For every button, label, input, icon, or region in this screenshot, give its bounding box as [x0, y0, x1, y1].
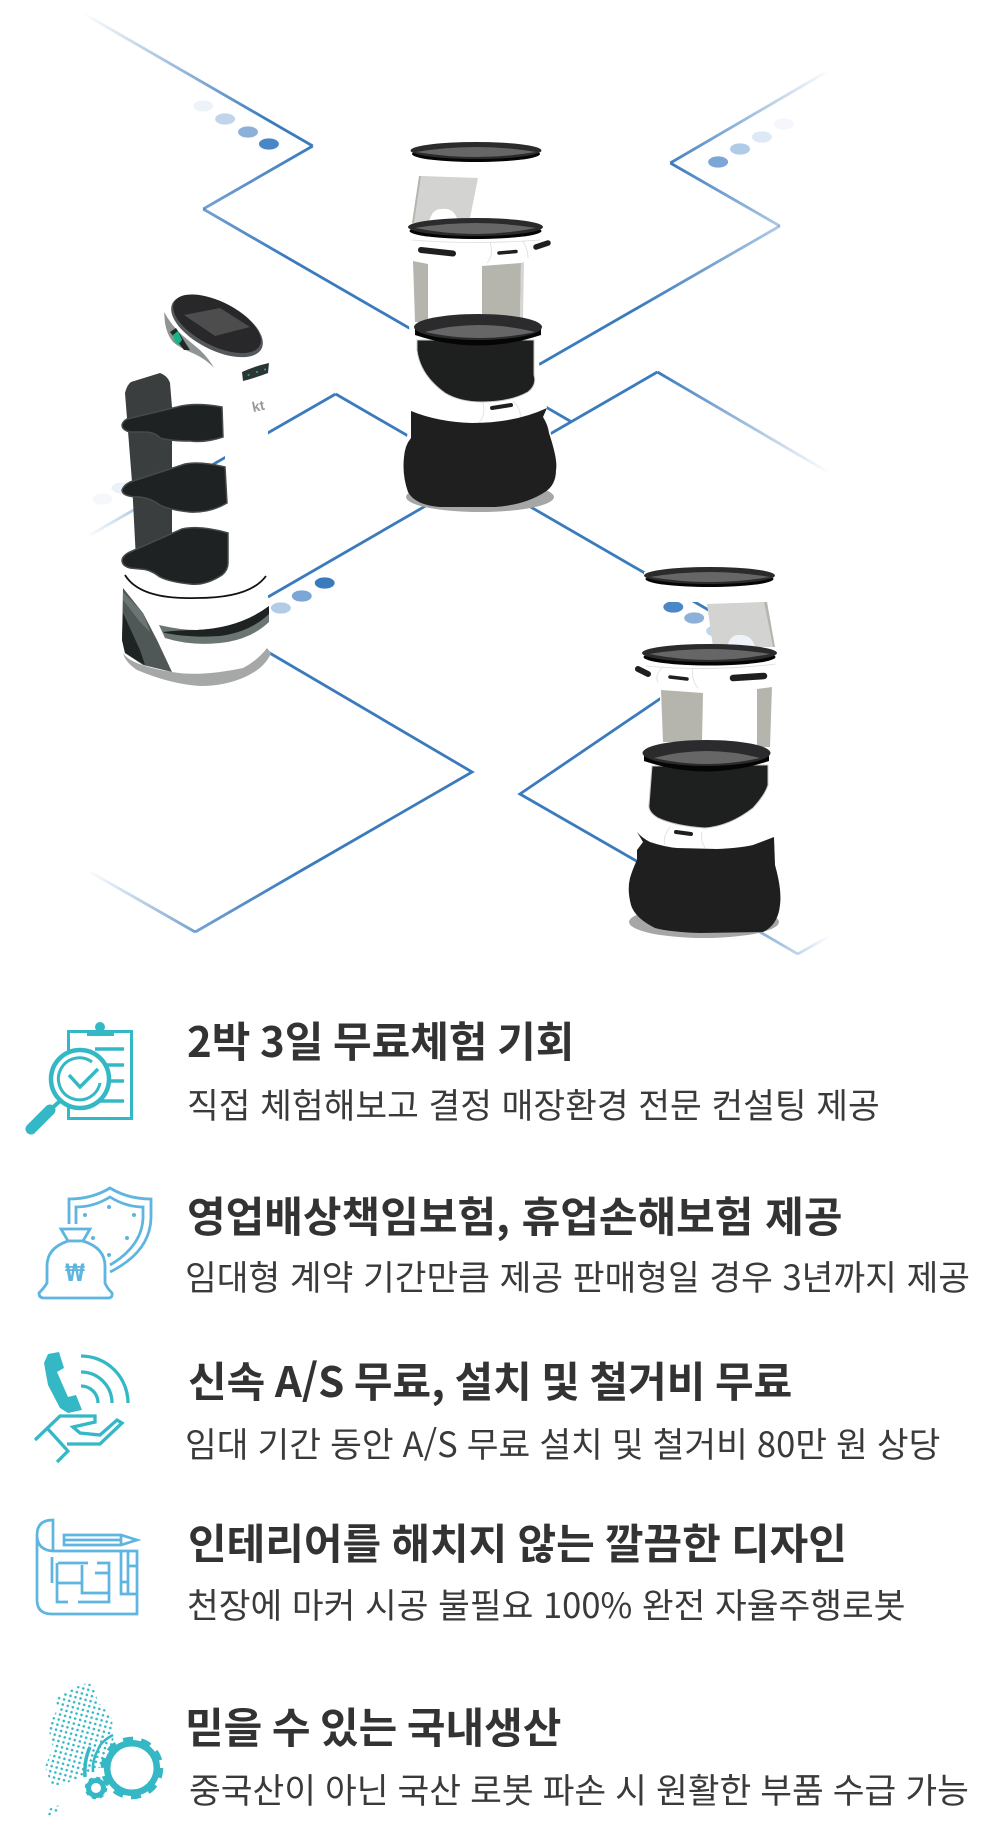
- decorative dot trails: [93, 100, 794, 637]
- robot: left assembled with kt logo: kt: [250, 397, 266, 415]
- description: 천장에 마커 시공 불필요 100% 완전 자율주행로봇: [187, 1578, 906, 1628]
- description: 임대 기간 동안 A/S 무료 설치 및 철거비 80만 원 상당: [185, 1417, 940, 1467]
- tray 1: [644, 567, 775, 587]
- icon: Korea map with gears: [45, 1683, 161, 1816]
- heading: 영업배상책임보험, 휴업손해보험 제공: [187, 1184, 842, 1245]
- robot: left assembled with kt logo: [122, 282, 272, 686]
- feature 3: free A/S: [35, 1349, 940, 1467]
- isometric guide lines: [83, 13, 830, 954]
- feature 1: free trial: [31, 1009, 880, 1129]
- heading: 2박 3일 무료체험 기회: [187, 1009, 574, 1070]
- description: 임대형 계약 기간만큼 제공 판매형일 경우 3년까지 제공: [185, 1250, 970, 1300]
- description: 직접 체험해보고 결정 매장환경 전문 컨설팅 제공: [187, 1078, 880, 1128]
- tray 2: [642, 644, 777, 666]
- tray 2: [408, 218, 543, 239]
- icon: floor plan blueprint: [37, 1520, 137, 1614]
- feature 4: interior design: [37, 1511, 906, 1628]
- robot: center exploded view: [404, 142, 556, 512]
- feature 2: insurance: [39, 1184, 970, 1300]
- heading: 인테리어를 해치지 않는 깔끔한 디자인: [188, 1511, 847, 1572]
- icon: clipboard with magnifier: [31, 1022, 132, 1129]
- icon: phone in hand: [35, 1352, 128, 1462]
- icon: shield and money bag: ₩: [65, 1259, 85, 1287]
- tray 1: [410, 142, 542, 162]
- feature 5: domestic production: [45, 1683, 969, 1816]
- description: 중국산이 아닌 국산 로봇 파손 시 원활한 부품 수급 가능: [189, 1763, 969, 1813]
- heading: 신속 A/S 무료, 설치 및 철거비 무료: [188, 1349, 792, 1410]
- robot: right exploded view: [629, 567, 780, 938]
- icon: shield and money bag: [39, 1188, 151, 1298]
- heading: 믿을 수 있는 국내생산: [185, 1695, 561, 1756]
